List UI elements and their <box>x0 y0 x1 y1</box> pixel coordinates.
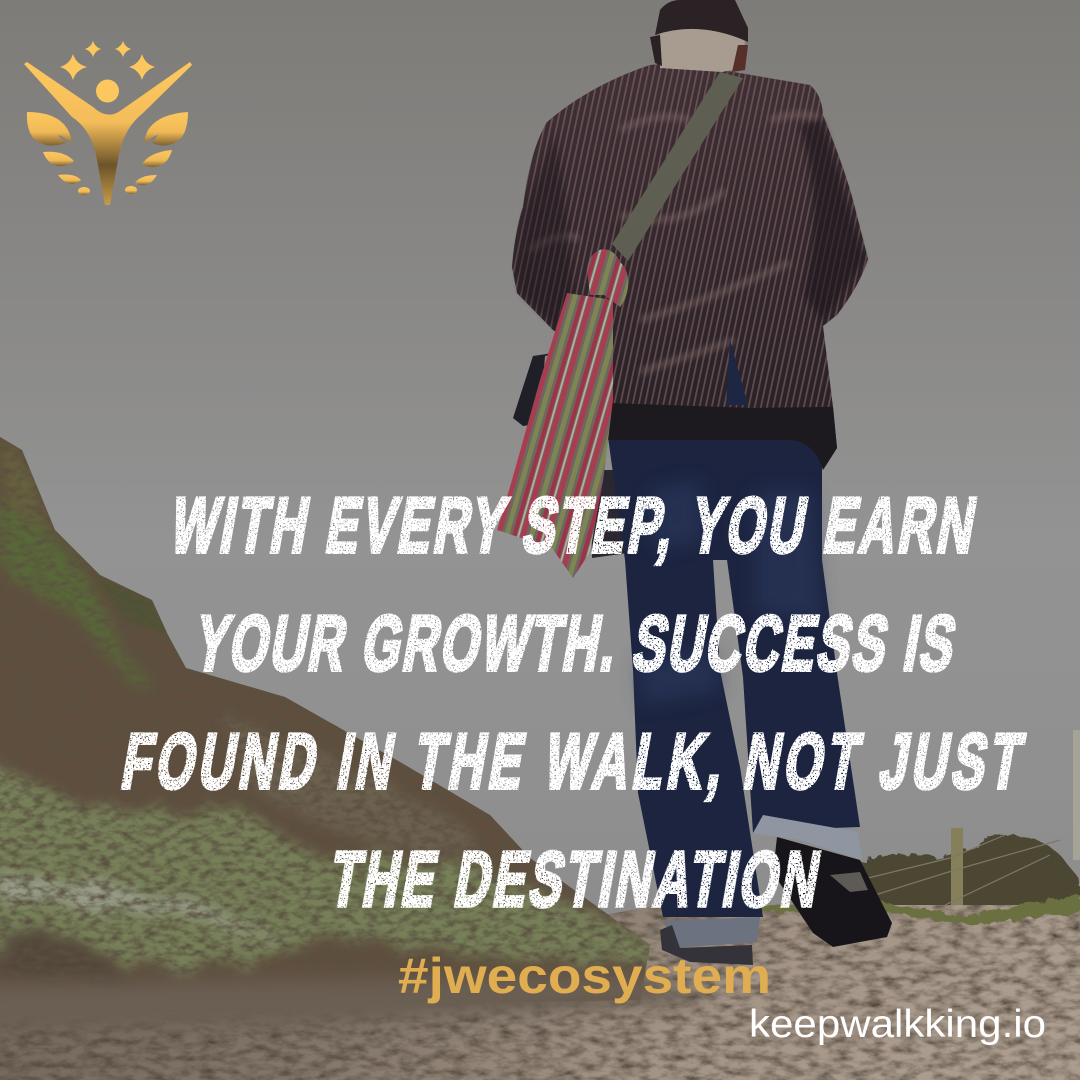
hill: dirt bank <box>0 430 660 1020</box>
left leg cuff <box>663 917 760 948</box>
quote line 2: YOUR GROWTH. SUCCESS IS <box>189 599 962 687</box>
jacket dark hem <box>607 403 837 470</box>
jacket right sleeve shadow <box>800 120 865 322</box>
messenger bag <box>513 352 565 426</box>
hat <box>655 0 748 42</box>
grass strip at right edge of path <box>760 895 1080 925</box>
right leg cuff <box>753 815 862 860</box>
hill: rear moss mound <box>100 579 166 632</box>
bag strap <box>612 72 743 261</box>
hill: upper grass tuft <box>0 500 155 690</box>
hill: dark clump <box>0 923 116 976</box>
jacket fold highlights <box>530 114 818 372</box>
logo: wings <box>27 112 188 195</box>
jacket corduroy stripes <box>512 63 868 408</box>
ground path <box>0 905 1080 1080</box>
soft transition between hill and path <box>0 975 720 1030</box>
hill: lower grass slope <box>0 745 700 965</box>
man walking <box>497 0 892 965</box>
scarf hanging <box>497 293 613 578</box>
jacket <box>512 63 868 470</box>
jacket left sleeve shadow <box>516 135 575 340</box>
hedge and fence at right <box>860 730 1080 915</box>
scarf knot <box>587 249 628 307</box>
quote text <box>116 481 1029 923</box>
logo: stars <box>60 41 155 80</box>
hashtag: #jwecosystem <box>398 948 771 1004</box>
ear left <box>650 35 662 66</box>
hillside <box>0 437 650 1001</box>
neck and head <box>660 29 745 72</box>
logo: head <box>96 80 119 102</box>
hill: pale grass highlights <box>0 870 280 940</box>
logo <box>24 41 192 205</box>
right shoe <box>773 837 892 947</box>
website url: keepwalkking.io <box>749 1003 1046 1046</box>
jeans <box>607 430 860 917</box>
logo: figure <box>24 62 192 205</box>
ear right <box>732 45 748 72</box>
left shoe <box>660 925 753 965</box>
jeans highlights <box>638 480 822 705</box>
hill: grain overlay <box>0 448 650 975</box>
hill: dirt patch on upper slope <box>230 720 480 850</box>
quote line 4: THE DESTINATION <box>324 835 827 923</box>
quote line 1: WITH EVERY STEP, YOU EARN <box>165 481 983 569</box>
quote line 3: FOUND IN THE WALK, NOT JUST <box>116 717 1029 805</box>
jacket vent <box>726 340 748 405</box>
hill: top tuft <box>1 448 46 518</box>
